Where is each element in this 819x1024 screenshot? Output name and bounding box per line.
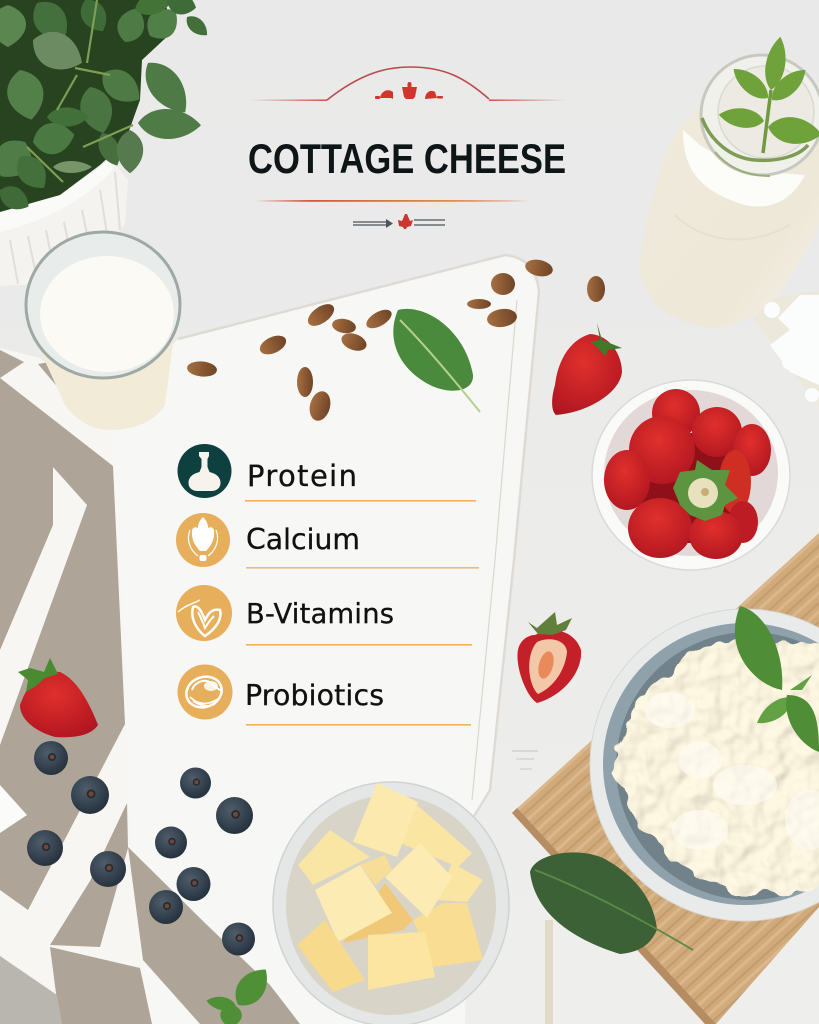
title: COTTAGE CHEESE bbox=[248, 135, 566, 182]
blueberries bbox=[27, 741, 255, 956]
nutrient row: b-vitamins bbox=[176, 585, 472, 646]
strawberry: top bbox=[552, 323, 622, 415]
mint at bottom bbox=[205, 961, 276, 1024]
nutrient row: probiotics bbox=[178, 664, 471, 726]
header ornament bbox=[250, 67, 566, 101]
strawberry: on towel bbox=[18, 658, 98, 737]
nutrient row: protein: Protein bbox=[247, 459, 357, 493]
bowl of cottage cheese bbox=[590, 609, 819, 921]
nutrient row: b-vitamins: B-Vitamins bbox=[246, 599, 394, 630]
cutting board: wooden right bbox=[512, 533, 819, 1024]
glass of milk bbox=[26, 232, 180, 430]
ribbed white bowl bbox=[0, 158, 128, 286]
nutrient row: calcium: Calcium bbox=[246, 523, 360, 556]
nutrient row: protein bbox=[178, 444, 476, 502]
strawberry: halved bbox=[517, 612, 581, 703]
title divider bbox=[255, 200, 530, 229]
table scuffs bbox=[512, 750, 553, 1024]
mint sprig in bottle bbox=[718, 35, 819, 153]
potted herb plant bbox=[0, 0, 212, 216]
spinach leaf on board bbox=[393, 309, 480, 412]
nutrient row: calcium bbox=[176, 513, 479, 569]
bowl of strawberries bbox=[592, 380, 790, 570]
bottle of milk bbox=[640, 55, 819, 328]
mint on cheese bbox=[735, 606, 819, 752]
bowl of cheese cubes bbox=[273, 782, 509, 1024]
towel bbox=[0, 348, 300, 1024]
spinach leaf on wood bbox=[530, 852, 693, 954]
nutrient row: probiotics: Probiotics bbox=[245, 679, 384, 712]
coconut flakes on paper bbox=[753, 290, 819, 408]
almonds on board bbox=[186, 257, 605, 423]
serving board: white bbox=[100, 255, 540, 1024]
